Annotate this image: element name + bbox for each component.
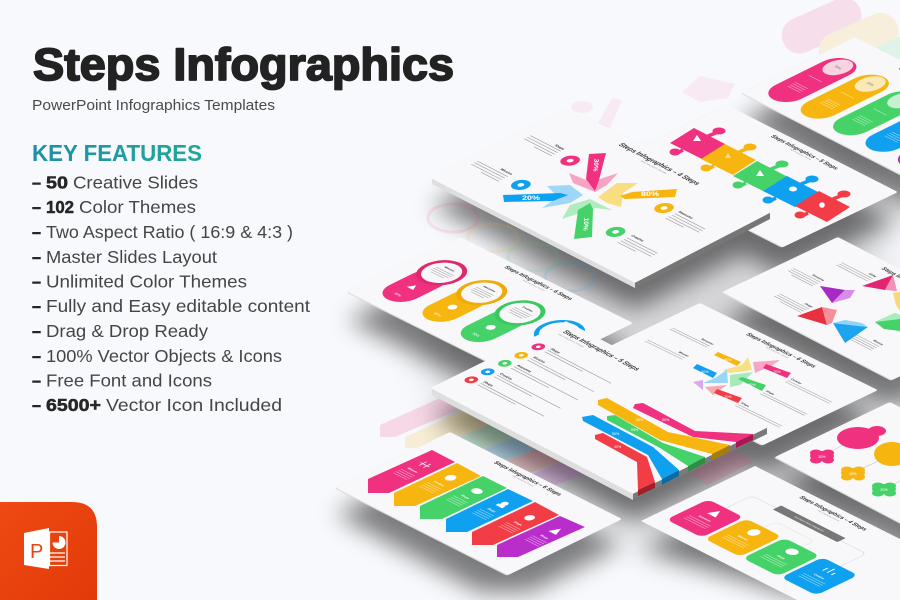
slide: six-part star, centre right: Shape [764,390,776,396]
slide: six-part star, centre right [584,303,878,446]
grey banner: Description About Infographics [793,516,826,532]
slide text: Steps Infographics Template [639,160,668,175]
slide: main four arrows [432,108,770,289]
gem: blue [833,320,868,343]
arrow: green [420,476,507,519]
slide text [468,114,748,258]
step green: Creative [521,306,535,313]
PowerPoint badge [0,502,97,600]
feature 2: – [32,197,41,217]
slide: six down arrows, bottom left: Steps Infographics Template [511,475,536,487]
step green: 20% [470,332,482,338]
feature 10: 6500+ [46,395,101,415]
slide text: Awesome [677,211,694,219]
step green [449,295,556,348]
ribbon: blue [582,415,679,485]
slide: circles and tabs, left [347,237,633,379]
step pink: Mission [443,266,456,272]
gem: red [797,307,837,325]
puzzle piece: blue [762,176,818,207]
star tags with values [693,352,791,403]
slide: bubbles, right [774,402,900,548]
feature list [32,172,310,415]
ambient shading behind the central slides [420,130,880,555]
slide text: Steps Infographics – 4 Steps [616,142,701,186]
arrow: yellow [394,463,481,506]
box: yellow [705,519,782,557]
arrow labels [393,458,568,546]
star tags with values: 80% [724,358,732,362]
gem: pink [862,275,897,291]
star pieces [693,357,780,395]
arrow: blue [446,489,533,532]
star tags with values: 50% [748,383,756,387]
slide: six-part star, centre right: Shape [739,402,751,407]
faded reflections of the slides [380,0,900,495]
step yellow: Awesome [482,285,497,293]
box: green: Shape [775,554,787,560]
slide text and numbered rows: Creative [498,373,514,380]
slide: six down arrows, bottom left [335,432,622,576]
feature 1: 50 [46,172,68,192]
puzzle piece: green [732,160,788,192]
slide: gems, right: Globe [867,272,878,278]
ribbon: green [607,415,705,472]
gem: purple [820,286,855,303]
arrow labels: Mission [406,467,419,474]
flower label: green [872,482,896,496]
feature 10: – [32,395,41,415]
step pink [371,255,478,308]
feature 10 [32,395,282,415]
bubble: pink [837,426,886,449]
slide text and numbered rows: Awesome [515,364,533,373]
feature 3: Two Aspect Ratio ( 16:9 & 4:3 ) [46,222,293,242]
ribbon: pink: 80% [662,418,670,422]
slide text and numbered rows: Shape [549,348,561,354]
arrow: red [472,502,559,545]
slide text and numbered rows: Shape [482,381,494,387]
slide: four boxes with connectors, bottom right: Steps Infographics – 4 Steps [797,496,869,532]
slide: four boxes with connectors, bottom right: Steps Infographics Template [816,510,841,522]
slide: five ribbons, centre [432,322,767,500]
subtitle: PowerPoint Infographics Templates [32,97,275,114]
heading: key features: KEY FEATURES [32,140,202,166]
icon: PowerPoint document: P [30,541,43,563]
ribbon: red [595,433,655,496]
ribbon: red: 40% [614,445,622,449]
bubble connectors [822,438,900,489]
step pink: 70% [392,292,404,297]
star tags with values: 70% [724,395,732,399]
feature 9: Free Font and Icons [46,370,212,390]
puzzle piece: yellow [700,144,756,175]
slide: pill steps, top right [741,37,900,181]
star tags with values: 70% [773,370,781,374]
arrow labels: Shape [512,521,524,526]
feature 4: – [32,247,41,267]
slide: gems, right: Shape [803,302,815,308]
slide text and numbered rows: Steps Infographics Template [557,333,585,348]
arrow labels: Shape [539,534,550,540]
slide: six-part star, centre right: Mission [677,351,690,357]
feature 3: – [32,222,41,242]
box: pink [666,499,744,537]
slide: four boxes with connectors, bottom right [641,466,900,600]
feature 7: – [32,321,41,341]
slide: pill steps, top right: 70% [832,65,844,70]
flower label: yellow [841,466,865,480]
slide: puzzle: Steps Infographics – 5 Steps [768,135,840,171]
arrow: pink [368,450,455,493]
feature 8: 100% Vector Objects & Icons [46,346,282,366]
slide: gems, right: Mission [872,339,885,346]
gem: green [875,313,900,331]
feature 5: – [32,272,41,292]
feature 9: – [32,370,41,390]
slide body and edge [432,108,770,289]
step yellow: 40% [432,312,444,317]
flower label: yellow: 40% [849,472,857,476]
slide: circles and tabs, left: Steps Infographics – 6 Steps [502,265,574,301]
slide: six down arrows, bottom left: Steps Infographics – 6 Steps [491,461,563,497]
slide: puzzle [611,105,898,248]
connector lines [726,496,866,566]
step yellow [411,275,518,328]
flower label: pink [810,450,834,464]
ribbon: blue: 50% [612,432,620,436]
gem: yellow [893,292,900,311]
arrow labels: Creative [432,480,446,487]
slide: circles and tabs, left: Steps Infographics Template [521,279,547,292]
feature 8: – [32,346,41,366]
puzzle piece: red [794,190,850,222]
grey banner [773,506,846,542]
feature 1: Creative Slides [73,172,198,192]
ribbon: yellow: 90% [636,418,644,422]
arrow bars with values: 20% [522,195,540,202]
ribbon: pink [633,403,753,448]
slide: puzzle: Steps Infographics Template [788,148,813,161]
arrow bars with values: 30% [591,158,600,172]
feature 7: Drag & Drop Ready [46,321,208,341]
flower label: pink: 30% [818,455,826,459]
slide text: Mission [499,168,514,176]
bubble: yellow [874,442,900,466]
feature 2: 102 [46,197,74,217]
arrow: purple [497,516,585,557]
box: blue [781,557,858,595]
slide body and edge [432,322,767,500]
slide text: Shape [553,144,566,150]
slide: six-part star, centre right: Steps Infographics – 6 Steps [744,333,818,369]
box: yellow: Mission [736,535,750,541]
box: blue: Creative [812,573,826,580]
arrow labels: Shape [486,507,498,513]
slide: gems, right [721,237,900,381]
slide text and numbered rows [462,329,641,420]
feature 2 [32,197,196,217]
arrow bars with values: 10% [581,217,590,231]
arrow bars with values: 80% [641,191,659,198]
feature 6: Fully and Easy editable content [46,296,310,316]
slide text and numbered rows: Steps Infographics – 5 Steps [560,330,641,372]
slide: six-part star, centre right: Creative [789,378,803,385]
box: pink: Awesome [697,515,713,522]
flower label: green: 20% [880,488,888,492]
star tags with values: 60% [701,370,709,374]
ribbon: yellow [598,398,730,460]
step blue ring [527,316,592,349]
feature 6: – [32,296,41,316]
feature 2: Color Themes [79,197,196,217]
feature 5: Unlimited Color Themes [46,272,247,292]
slide shadows [336,65,900,598]
slide: six-part star, centre right: Awesome [700,338,716,346]
feature 4: Master Slides Layout [46,247,217,267]
translucent star petals [542,173,638,219]
feature 10: Vector Icon Included [106,395,282,415]
slide: pill steps, top right: 20% [865,81,876,87]
slide: gems, right: Awesome [811,274,826,282]
puzzle piece: pink [670,128,726,159]
slide: six-part star, centre right: Steps Infographics Template [764,346,790,359]
box: green [743,538,820,576]
slide text: Creative [630,234,645,242]
slide text and numbered rows: Mission [532,356,546,364]
feature 1: – [32,172,41,192]
arrow labels: Shape [460,494,471,500]
ribbon: green: 65% [631,428,639,432]
arrow bars with values [503,153,677,239]
title: Steps Infographics [33,39,454,90]
